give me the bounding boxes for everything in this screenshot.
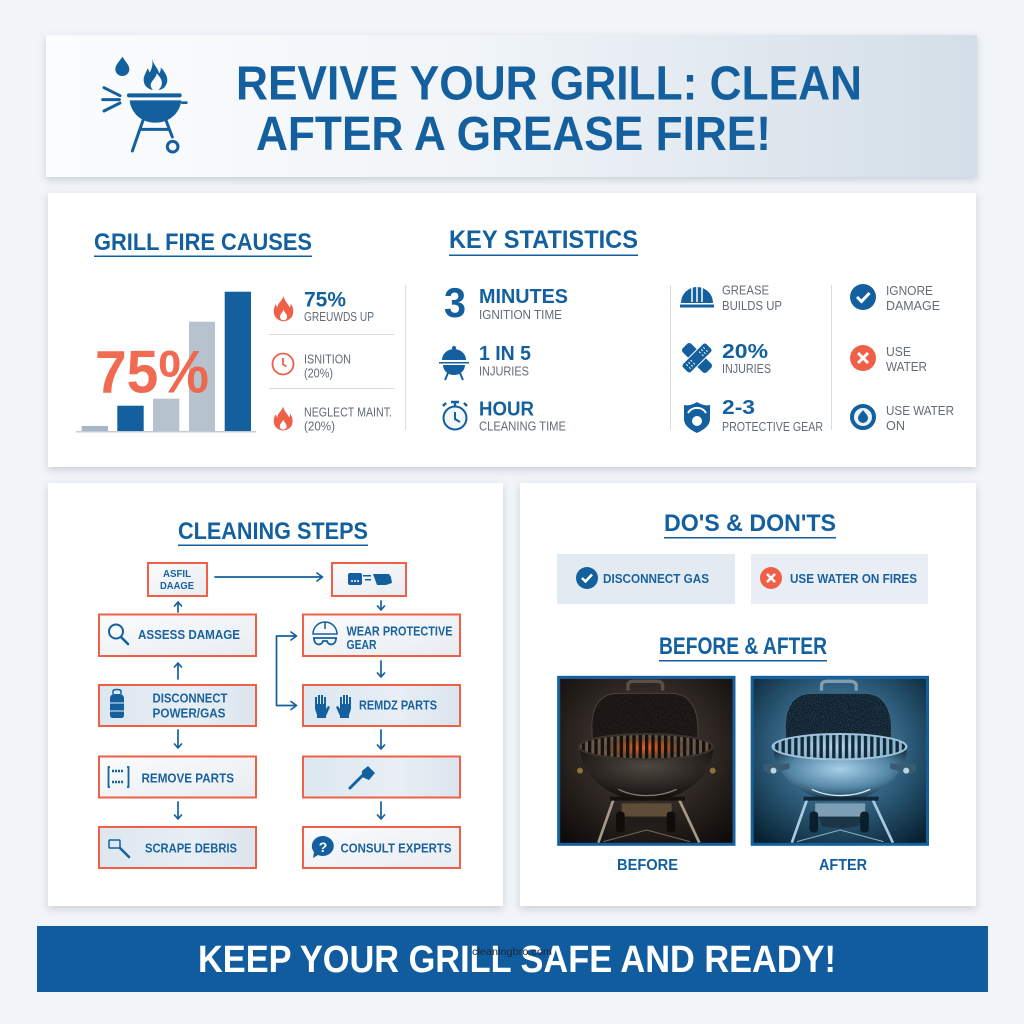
stat: 2-3 protective gear: 2-3 xyxy=(722,396,755,419)
stat: 1 in 5: INJURIES xyxy=(479,364,529,378)
stat: 2-3 protective gear: PROTECTIVE GEAR xyxy=(722,419,823,434)
cause: grease builds up xyxy=(274,288,374,324)
stat: hour: CLEANING TIME xyxy=(479,418,566,434)
cause: grease builds up: GREUWDS UP xyxy=(304,310,374,324)
arrow: down to scrape debris xyxy=(174,802,182,819)
stat: 20% injuries xyxy=(673,334,771,382)
icon: grill with flame and water drop xyxy=(103,57,188,152)
panel: do's and don'ts, before and after xyxy=(520,483,976,906)
cause: neglect maintenance xyxy=(274,406,392,434)
title xyxy=(236,56,862,161)
don't item: ignore damage xyxy=(850,283,940,313)
step: tools icon box xyxy=(332,563,406,596)
don't: use water on fires xyxy=(751,554,928,604)
heading: before and after: BEFORE & AFTER xyxy=(659,633,827,660)
stat: grease builds up: GREASE xyxy=(722,282,769,298)
stat: hour: HOUR xyxy=(479,398,534,420)
title: REVIVE YOUR GRILL: CLEAN xyxy=(236,56,862,110)
step: asfil daage: ASFIL xyxy=(163,568,192,580)
cause: grease builds up: 75% xyxy=(304,288,346,312)
cause: neglect maintenance: (20%) xyxy=(304,420,335,434)
panel: cleaning steps xyxy=(48,483,503,906)
stat: 1 in 5 xyxy=(439,342,531,380)
stat: 3 minutes: MINUTES xyxy=(479,285,568,308)
stat: 1 in 5: 1 IN 5 xyxy=(479,342,531,365)
heading: cleaning steps: CLEANING STEPS xyxy=(178,518,368,545)
cause: neglect maintenance: NEGLECT MAINT. xyxy=(304,406,392,420)
heading: do's and don'ts: DO'S & DON'TS xyxy=(664,510,836,537)
don't item: use water: USE xyxy=(886,344,911,359)
arrow: down to brush step xyxy=(378,730,384,749)
step: remove parts xyxy=(99,756,256,798)
stat: 3 minutes: IGNITION TIME xyxy=(479,307,562,322)
arrow: up to assess xyxy=(174,663,182,679)
cause: ignition: (20%) xyxy=(304,366,333,380)
label: after: AFTER xyxy=(819,857,867,874)
step: wear protective gear xyxy=(303,614,460,656)
title: AFTER A GREASE FIRE! xyxy=(256,107,771,161)
arrow: down to remove parts xyxy=(174,730,182,748)
arrow: down to remove parts right xyxy=(378,661,384,677)
step: asfil daage: DAAGE xyxy=(160,580,194,592)
stat: grease builds up xyxy=(680,282,782,313)
step: asfil daage xyxy=(148,563,207,596)
don't item: use water xyxy=(850,344,927,374)
label: before: BEFORE xyxy=(617,857,678,874)
don't item: use water on xyxy=(852,403,954,433)
stat: 3 minutes: 3 xyxy=(444,279,466,326)
stat: grease builds up: BUILDS UP xyxy=(722,298,782,313)
step: disconnect power/gas: DISCONNECT xyxy=(152,692,228,706)
cause: ignition xyxy=(272,352,351,380)
don't item: ignore damage: DAMAGE xyxy=(886,298,940,313)
bar chart xyxy=(76,292,256,432)
footer banner: KEEP YOUR GRILL SAFE AND READY! xyxy=(198,939,836,981)
don't item: ignore damage: IGNORE xyxy=(886,283,933,298)
step: remove parts: REMOVE PARTS xyxy=(142,772,234,786)
step: wear protective gear: WEAR PROTECTIVE xyxy=(346,624,452,638)
image: grill before cleaning xyxy=(559,677,734,844)
don't item: use water on: USE WATER xyxy=(886,403,954,418)
stat: hour xyxy=(443,398,566,434)
stat: 3 minutes xyxy=(444,279,568,326)
stat: 20% injuries: 20% xyxy=(722,340,768,363)
step: assess damage xyxy=(99,614,256,656)
step: wear protective gear: GEAR xyxy=(346,638,376,652)
arrow: down to wear gear xyxy=(378,601,384,610)
stat: 20% injuries: INJURIES xyxy=(722,361,771,376)
watermark: cleaningbro.com xyxy=(472,946,552,958)
step: consult experts: ? xyxy=(319,839,327,855)
step: disconnect power/gas: POWER/GAS xyxy=(152,706,226,720)
step: scrape debris: SCRAPE DEBRIS xyxy=(145,842,237,856)
arrow: top across xyxy=(215,573,322,581)
heading: key statistics: KEY STATISTICS xyxy=(449,226,638,254)
cause: ignition: ISNITION xyxy=(304,352,351,366)
step: assess damage: ASSESS DAMAGE xyxy=(138,628,240,642)
step: consult experts xyxy=(303,827,460,868)
header panel xyxy=(46,35,977,177)
step: disconnect power/gas xyxy=(99,685,256,726)
heading: grill fire causes: GRILL FIRE CAUSES xyxy=(94,229,312,256)
image: grill after cleaning xyxy=(752,677,927,844)
footer banner xyxy=(37,926,988,992)
do: disconnect gas xyxy=(557,554,735,604)
arrow: down to consult experts xyxy=(378,802,384,819)
don't item: use water: WATER xyxy=(886,359,927,374)
arrow: up to asfil xyxy=(174,602,182,612)
stat: 2-3 protective gear xyxy=(684,396,823,434)
panel: statistics xyxy=(48,193,976,467)
bar chart: 75% xyxy=(95,339,209,406)
don't: use water on fires: USE WATER ON FIRES xyxy=(790,572,917,586)
do: disconnect gas: DISCONNECT GAS xyxy=(603,572,709,586)
step: consult experts: CONSULT EXPERTS xyxy=(340,842,452,856)
step: brush xyxy=(303,756,460,798)
step: remove parts with gloves: REMDZ PARTS xyxy=(359,698,437,712)
arrow: bracket connector xyxy=(276,632,296,710)
step: scrape debris xyxy=(99,827,256,868)
step: remove parts with gloves xyxy=(303,685,460,726)
don't item: use water on: ON xyxy=(886,418,905,433)
